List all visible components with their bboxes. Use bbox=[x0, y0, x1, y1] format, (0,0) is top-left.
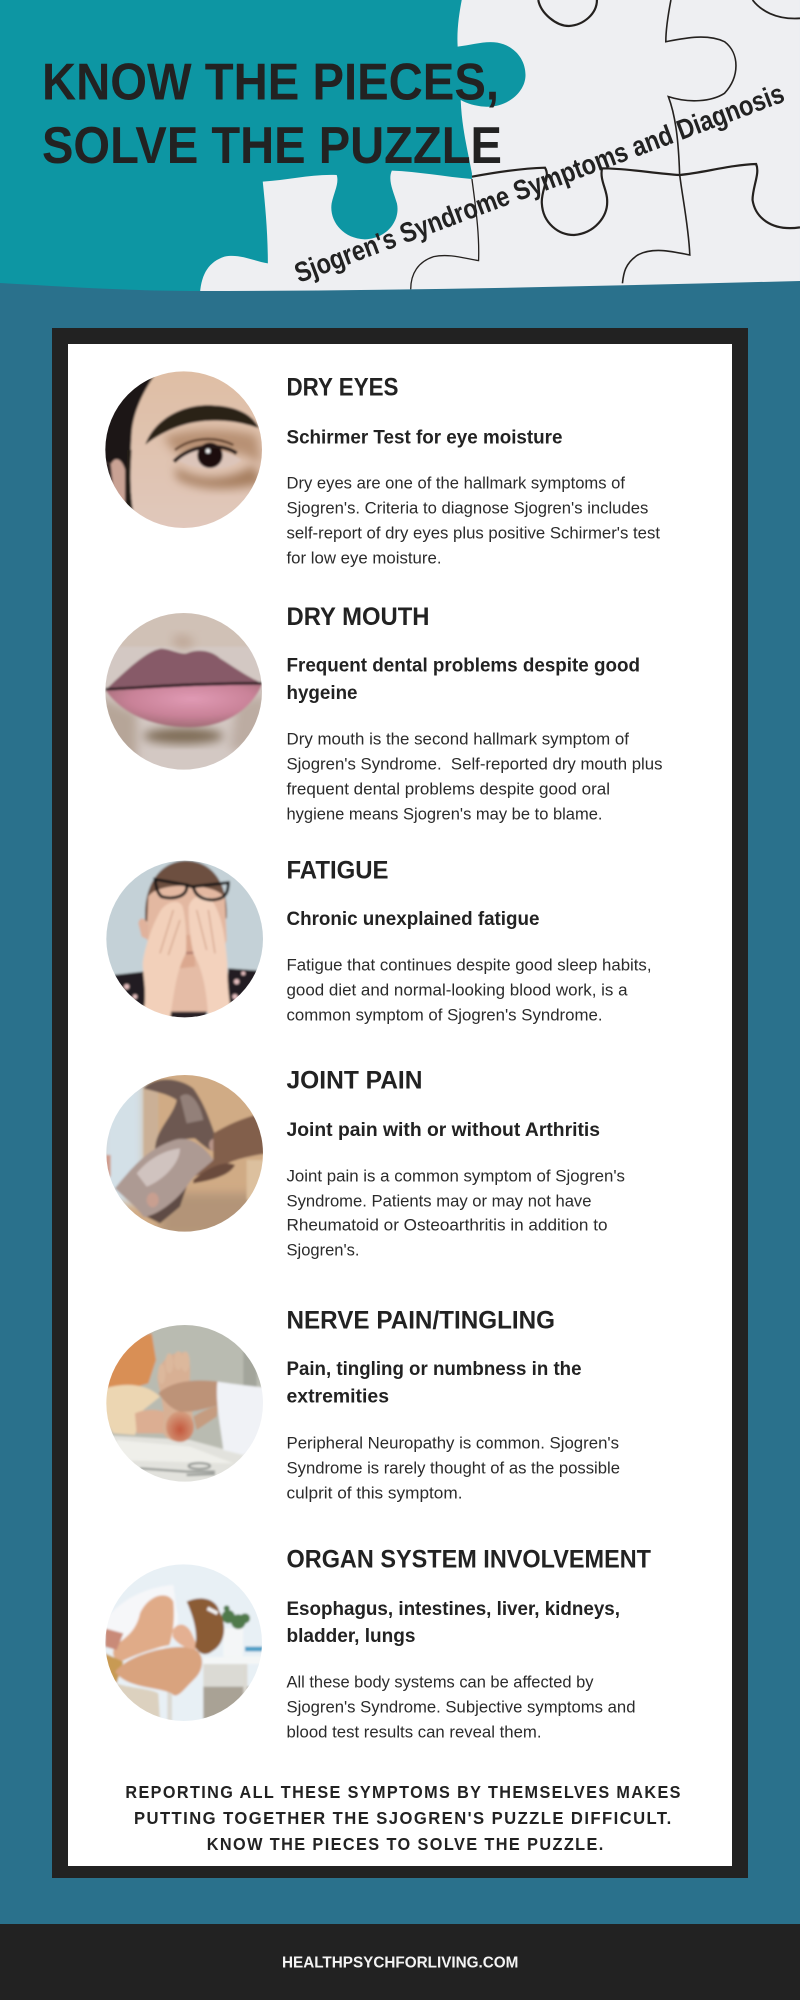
body: dry eyes: for low eye moisture. bbox=[286, 548, 442, 567]
subheading: organs: Esophagus, intestines, liver, kidneys, bbox=[286, 1599, 620, 1620]
body: organ system bbox=[286, 1672, 636, 1741]
panel: nerve pain bbox=[100, 1306, 620, 1502]
heading: fatigue: FATIGUE bbox=[286, 856, 388, 884]
header: puzzle photo bbox=[0, 0, 800, 295]
title: SOLVE THE PUZZLE bbox=[42, 117, 502, 175]
footer bar bbox=[0, 1924, 800, 2000]
body: dry mouth: hygiene means Sjogren's may be to blame. bbox=[286, 804, 602, 823]
subheading: dental problems: Frequent dental problems despite good bbox=[286, 656, 640, 677]
body: joint pain: Sjogren's. bbox=[286, 1240, 360, 1259]
subheading: arthritis: Joint pain with or without Arthritis bbox=[286, 1120, 600, 1141]
subheading: extremities: Pain, tingling or numbness in the bbox=[286, 1359, 582, 1380]
title: KNOW THE PIECES, bbox=[42, 54, 499, 112]
heading: organ system: ORGAN SYSTEM INVOLVEMENT bbox=[286, 1546, 651, 1574]
body: fatigue: good diet and normal-looking blood work, is a bbox=[286, 980, 628, 999]
body: fatigue bbox=[286, 955, 652, 1024]
subheading: organs bbox=[286, 1599, 620, 1647]
subheading: extremities: extremities bbox=[286, 1387, 389, 1408]
body: nerve pain: culprit of this symptom. bbox=[286, 1483, 462, 1502]
subheading: chronic fatigue: Chronic unexplained fatigue bbox=[286, 909, 540, 930]
subheading: schirmer test: Schirmer Test for eye moisture bbox=[286, 427, 562, 448]
footer url: HEALTHPSYCHFORLIVING.COM bbox=[282, 1954, 518, 1971]
subheading: organs: bladder, lungs bbox=[286, 1626, 416, 1647]
body: dry mouth: Sjogren's Syndrome. Self-reported dry mouth plus bbox=[286, 754, 662, 773]
heading: dry eyes: DRY EYES bbox=[286, 374, 398, 402]
body: joint pain: Rheumatoid or Osteoarthritis in addition to bbox=[286, 1215, 608, 1234]
subheading: dental problems: hygeine bbox=[286, 683, 358, 704]
closing statement: PUTTING TOGETHER THE SJOGREN'S PUZZLE DIFFICULT. bbox=[134, 1808, 673, 1828]
panel: fatigue bbox=[100, 856, 651, 1024]
body: dry eyes: Sjogren's. Criteria to diagnose Sjogren's includes bbox=[286, 499, 648, 518]
body: fatigue: common symptom of Sjogren's Syndrome. bbox=[286, 1005, 602, 1024]
body: organ system: blood test results can reveal them. bbox=[286, 1722, 542, 1741]
body: dry eyes bbox=[286, 474, 660, 567]
body: organ system: All these body systems can be affected by bbox=[286, 1672, 594, 1691]
panel: dry eyes bbox=[100, 367, 660, 567]
photo: foot exam bbox=[106, 1325, 263, 1482]
heading: dry mouth: DRY MOUTH bbox=[286, 603, 430, 631]
photo: eye bbox=[105, 371, 262, 528]
heading: nerve pain: NERVE PAIN/TINGLING bbox=[286, 1306, 555, 1334]
heading: joint pain: JOINT PAIN bbox=[286, 1067, 422, 1095]
body: nerve pain: Syndrome is rarely thought of as the possible bbox=[286, 1458, 620, 1477]
photo: woman covering eyes bbox=[106, 860, 263, 1018]
panel: joint pain bbox=[100, 1067, 625, 1259]
white content panel bbox=[68, 344, 732, 1866]
body: organ system: Sjogren's Syndrome. Subjective symptoms and bbox=[286, 1697, 636, 1716]
body: dry eyes: Dry eyes are one of the hallmark symptoms of bbox=[286, 474, 625, 493]
body: fatigue: Fatigue that continues despite good sleep habits, bbox=[286, 955, 652, 974]
photo: woman doubled over bbox=[105, 1564, 262, 1721]
subheading: dental problems bbox=[286, 656, 640, 704]
body: dry mouth bbox=[286, 729, 662, 823]
body: joint pain: Syndrome. Patients may or may not have bbox=[286, 1191, 592, 1210]
body: dry mouth: frequent dental problems despite good oral bbox=[286, 779, 610, 798]
body: joint pain: Joint pain is a common symptom of Sjogren's bbox=[286, 1166, 625, 1185]
wave edge bbox=[0, 281, 800, 320]
subheading: extremities bbox=[286, 1359, 582, 1408]
body: dry mouth: Dry mouth is the second hallmark symptom of bbox=[286, 729, 629, 748]
body: joint pain bbox=[286, 1166, 625, 1259]
panel: dry mouth bbox=[100, 603, 662, 823]
photo: lips bbox=[105, 613, 262, 770]
body: nerve pain: Peripheral Neuropathy is common. Sjogren's bbox=[286, 1433, 619, 1452]
panel: organ system involvement bbox=[100, 1546, 651, 1741]
body: nerve pain bbox=[286, 1433, 620, 1502]
photo: hands bbox=[106, 1075, 263, 1232]
dark frame bbox=[52, 328, 748, 1878]
body: dry eyes: self-report of dry eyes plus positive Schirmer's test bbox=[286, 524, 660, 543]
closing statement: REPORTING ALL THESE SYMPTOMS BY THEMSELVES MAKES bbox=[125, 1782, 682, 1802]
closing statement: KNOW THE PIECES TO SOLVE THE PUZZLE. bbox=[207, 1834, 605, 1854]
closing statement bbox=[125, 1782, 682, 1854]
title bbox=[42, 54, 502, 175]
